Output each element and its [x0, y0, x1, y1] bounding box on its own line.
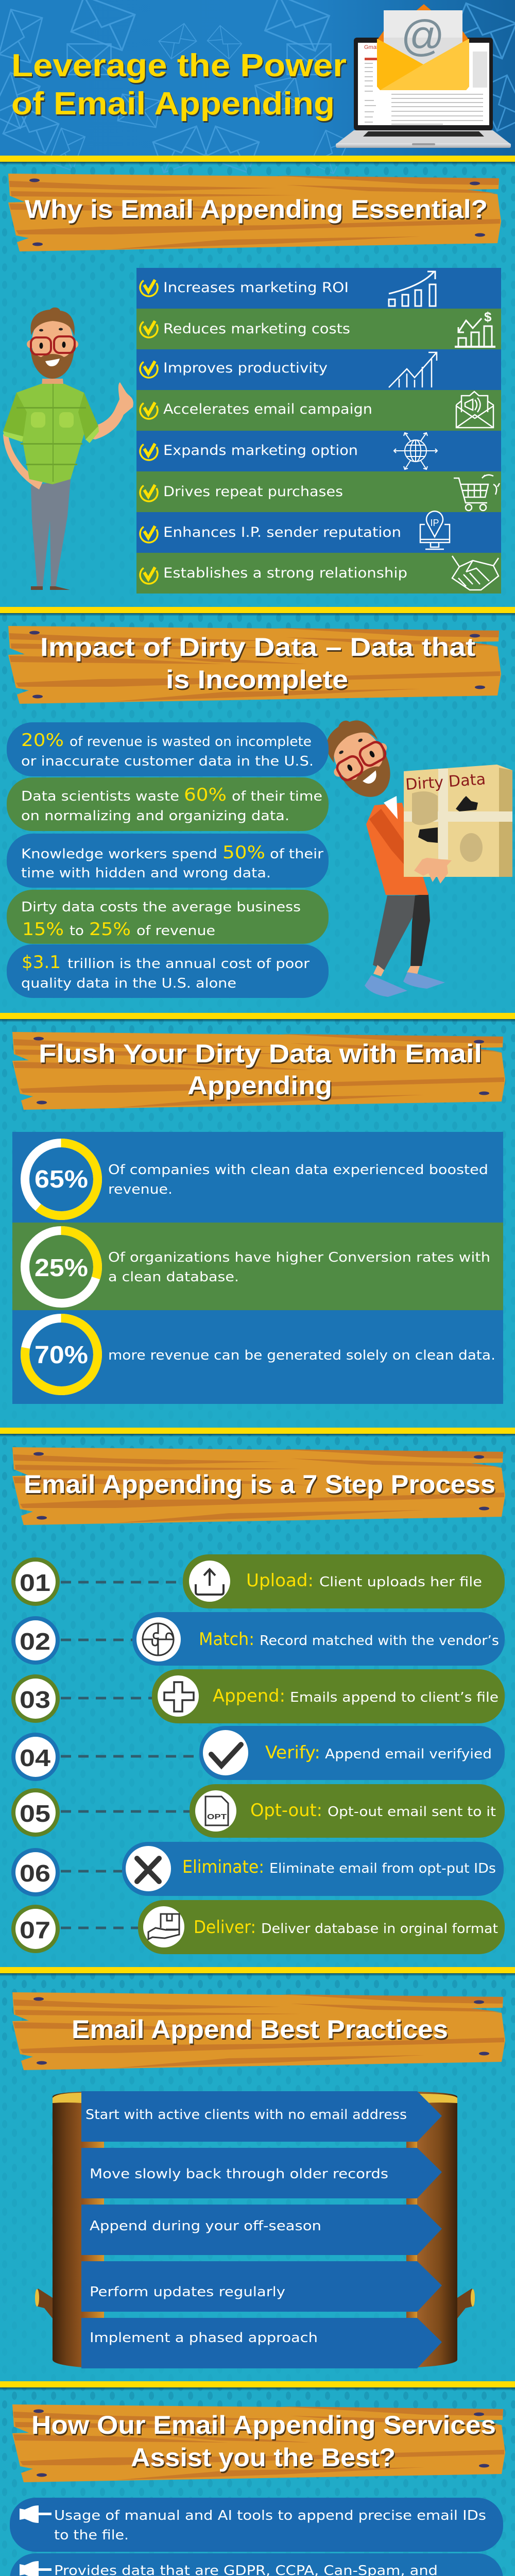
- icon: IP monitor pin: IP: [430, 518, 439, 528]
- icon: hand with box: [148, 1914, 179, 1939]
- step 07 deliver: Deliver:: [194, 1917, 256, 1938]
- stat: 50% knowledge workers: 50%: [222, 842, 265, 863]
- icon: handshake: [452, 556, 499, 590]
- stat: 60% data scientists: Data scientists waste: [21, 789, 179, 804]
- section background: flush: [0, 1019, 515, 1428]
- heading sign: is Incomplete: [166, 665, 348, 694]
- title: Leverage the Power: [11, 48, 347, 83]
- stat: 20% revenue wasted: or inaccurate customer data in the U.S.: [21, 754, 314, 769]
- step 03 append: [11, 1669, 505, 1723]
- arrow: perform updates: [81, 2261, 442, 2312]
- arrow: move slowly back: [81, 2148, 442, 2198]
- panel: 7 step process: [11, 1447, 505, 1954]
- step 03 append: 03: [20, 1686, 50, 1713]
- panel: why is email appending essential: [3, 174, 501, 594]
- stat: 15% to 25% of revenue: [7, 890, 329, 944]
- icon: opt-out document: [205, 1797, 228, 1825]
- arrow: start with active clients: Start with active clients with no email address: [85, 2107, 407, 2123]
- panel: email append best practices: [12, 1992, 505, 2368]
- step 02 match: Match:: [199, 1629, 254, 1650]
- arrow: append during off-season: Append during your off-season: [90, 2218, 321, 2234]
- step 02 match: 02: [20, 1628, 50, 1655]
- row: reduces marketing costs: [136, 309, 501, 349]
- donut chart 65%: [25, 1143, 98, 1216]
- stat: 50% knowledge workers: Knowledge workers spend: [21, 846, 217, 862]
- icon: check mark: [211, 1744, 241, 1766]
- heading sign: How Our Email Appending Services: [31, 2411, 496, 2439]
- stat: 25% conversion rates: a clean database.: [108, 1269, 239, 1285]
- donut chart 65%: 65%: [35, 1166, 88, 1193]
- stat: 60% data scientists: [7, 777, 329, 831]
- heading sign: Why is Email Appending Essential?: [25, 195, 488, 224]
- stat: 25% conversion rates: [12, 1223, 503, 1310]
- step 04 verify: Verify:: [265, 1742, 320, 1763]
- row: expands marketing option: Expands marketing option: [163, 443, 358, 459]
- section background: best practices: [0, 1973, 515, 2381]
- step 01 upload: 01: [20, 1569, 50, 1596]
- stat: 50% knowledge workers: of their: [270, 846, 323, 862]
- character: man pointing: [3, 308, 133, 590]
- divider bar: [0, 607, 515, 613]
- donut chart 70%: [25, 1318, 98, 1391]
- step 06 eliminate: 06: [20, 1860, 50, 1887]
- icon: plus: [164, 1682, 194, 1711]
- row: establishes a strong relationship: Establishes a strong relationship: [163, 565, 407, 581]
- list item: manual and AI tools: [10, 2498, 503, 2552]
- arrow: phased approach: [81, 2318, 442, 2368]
- step 05 opt-out: 05: [20, 1800, 50, 1827]
- row: establishes a strong relationship: [136, 553, 501, 594]
- row: improves productivity: [136, 349, 501, 390]
- stat: $3.1 trillion: [7, 944, 329, 998]
- section background: benefits: [0, 162, 515, 607]
- donut chart 70%: 70%: [35, 1342, 88, 1369]
- step 01 upload: Upload:: [246, 1570, 314, 1591]
- row: enhances IP sender reputation: Enhances I.P. sender reputation: [163, 524, 401, 540]
- row: increases marketing ROI: [136, 268, 501, 309]
- arrow: append during off-season: [81, 2205, 442, 2255]
- heading sign: [8, 626, 501, 704]
- title: of Email Appending: [11, 86, 335, 122]
- panel: flush your dirty data: [12, 1032, 505, 1404]
- list item: compliance: [10, 2553, 503, 2576]
- icon: growth bars: [389, 272, 436, 306]
- heading sign: Email Appending is a 7 Step Process: [24, 1470, 495, 1499]
- stat: 70% more revenue: more revenue can be generated solely on clean data.: [108, 1348, 495, 1363]
- icon: opt-out document: OPT: [207, 1812, 227, 1821]
- icon: productivity trend: [389, 352, 437, 387]
- icon: IP monitor pin: [420, 511, 450, 549]
- wooden signpost: [35, 2092, 475, 2367]
- arrow: move slowly back: Move slowly back through older records: [90, 2166, 388, 2182]
- stat: 65% boosted revenue: [12, 1132, 503, 1223]
- divider bar: [0, 156, 515, 162]
- icon: cost chart: [455, 309, 495, 347]
- row: drives repeat purchases: Drives repeat purchases: [163, 484, 343, 500]
- divider bar: [0, 1967, 515, 1973]
- stat: 50% knowledge workers: time with hidden and wrong data.: [21, 866, 271, 881]
- heading sign: Appending: [187, 1071, 332, 1100]
- icon: upload: [196, 1569, 224, 1595]
- icon: cost chart: $: [484, 309, 492, 325]
- stat: 15% to 25% of revenue: 15%: [22, 919, 64, 940]
- stat: 70% more revenue: [12, 1310, 503, 1404]
- step 04 verify: [11, 1726, 505, 1781]
- heading sign: Email Append Best Practices: [72, 2015, 448, 2044]
- stat: 65% boosted revenue: Of companies with clean data experienced boosted: [108, 1162, 488, 1178]
- row: accelerates email campaign: Accelerates email campaign: [163, 401, 372, 417]
- step 06 eliminate: Eliminate:: [182, 1857, 264, 1877]
- divider bar: [0, 2381, 515, 2387]
- stat: 60% data scientists: of their time: [232, 789, 322, 804]
- stat: 15% to 25% of revenue: of revenue: [136, 923, 215, 939]
- stat: 15% to 25% of revenue: 25%: [89, 919, 131, 940]
- stat: 60% data scientists: on normalizing and organizing data.: [21, 808, 289, 824]
- step 04 verify: Append email verifyied: [325, 1747, 492, 1762]
- divider bar: [0, 1013, 515, 1019]
- icon: puzzle: [143, 1623, 174, 1655]
- row: increases marketing ROI: Increases marketing ROI: [163, 280, 349, 296]
- stat: $3.1 trillion: trillion is the annual cost of poor: [67, 956, 310, 972]
- heading sign: Flush Your Dirty Data with Email: [39, 1039, 482, 1068]
- row: drives repeat purchases: [136, 471, 501, 512]
- title: [11, 48, 347, 122]
- section background: dirty data: [0, 613, 515, 1013]
- donut chart 25%: 25%: [35, 1255, 88, 1282]
- row: expands marketing option: [136, 431, 501, 471]
- step 05 opt-out: [11, 1784, 505, 1838]
- list item: manual and AI tools: to the file.: [54, 2528, 129, 2543]
- step 04 verify: 04: [20, 1744, 50, 1771]
- heading sign: [12, 2404, 505, 2482]
- step 01 upload: Client uploads her file: [319, 1574, 482, 1590]
- divider bar: [0, 1428, 515, 1434]
- step 03 append: Append:: [213, 1686, 285, 1706]
- row: reduces marketing costs: Reduces marketing costs: [163, 321, 350, 337]
- stat: $3.1 trillion: $3.1: [22, 952, 61, 973]
- step 05 opt-out: Opt-out:: [250, 1800, 322, 1821]
- icon: shopping cart: [454, 475, 500, 511]
- heading sign: [12, 1447, 505, 1525]
- donut chart 25%: [25, 1230, 98, 1303]
- stat: 15% to 25% of revenue: to: [70, 923, 84, 939]
- step 02 match: Record matched with the vendor’s: [260, 1633, 499, 1649]
- icon: globe with arrows: [394, 433, 437, 469]
- character: man carrying a dirty data box: [314, 708, 512, 997]
- row: improves productivity: Improves productivity: [163, 360, 328, 376]
- step 01 upload: [11, 1554, 505, 1608]
- row: accelerates email campaign: [136, 390, 501, 431]
- icon: laptop with email envelope: [336, 4, 511, 148]
- heading sign: Impact of Dirty Data – Data that: [40, 633, 475, 662]
- panel: impact of dirty data: [7, 626, 512, 998]
- stat: $3.1 trillion: quality data in the U.S. alone: [21, 976, 236, 991]
- stat: 50% knowledge workers: [7, 834, 329, 888]
- icon: mail with megaphone: [456, 392, 493, 428]
- arrow: perform updates: Perform updates regularly: [90, 2284, 285, 2300]
- step 07 deliver: [11, 1900, 505, 1954]
- dirty data box: Dirty Data: [405, 770, 486, 794]
- section background: services: [0, 2387, 515, 2576]
- header banner: [0, 0, 515, 174]
- stat: 25% conversion rates: Of organizations have higher Conversion rates with: [108, 1250, 490, 1265]
- step 03 append: Emails append to client’s file: [290, 1690, 499, 1705]
- stat: 15% to 25% of revenue: Dirty data costs the average business: [21, 900, 301, 915]
- step 06 eliminate: Eliminate email from opt-put IDs: [269, 1861, 496, 1876]
- step 02 match: [11, 1612, 505, 1666]
- step 07 deliver: Deliver database in orginal format: [261, 1921, 498, 1937]
- arrow: start with active clients: [81, 2091, 442, 2142]
- icon: cross: [137, 1858, 159, 1882]
- stat: 60% data scientists: 60%: [184, 785, 227, 805]
- step 07 deliver: 07: [20, 1917, 50, 1943]
- heading sign: Assist you the Best?: [131, 2443, 396, 2472]
- heading sign: [8, 174, 501, 251]
- stat: 20% revenue wasted: [7, 722, 329, 776]
- stat: 65% boosted revenue: revenue.: [108, 1182, 173, 1197]
- panel: how our services assist: [10, 2404, 505, 2576]
- arrow: phased approach: Implement a phased approach: [90, 2330, 318, 2346]
- step 06 eliminate: [11, 1842, 504, 1896]
- dirty data box: [404, 765, 512, 877]
- heading sign: [12, 1032, 505, 1110]
- icon: laptop with email envelope: Gmail: [364, 44, 379, 50]
- stat: 20% revenue wasted: 20%: [21, 730, 64, 751]
- icon: laptop with email envelope: @: [401, 11, 445, 60]
- row: enhances IP sender reputation: [136, 511, 501, 553]
- benefit list: [136, 268, 501, 594]
- list item: manual and AI tools: Usage of manual and AI tools to append precise email IDs: [54, 2508, 486, 2523]
- step 05 opt-out: Opt-out email sent to it: [328, 1804, 496, 1820]
- section background: steps: [0, 1434, 515, 1967]
- heading sign: [12, 1992, 505, 2070]
- stat: 20% revenue wasted: of revenue is wasted on incomplete: [70, 734, 312, 750]
